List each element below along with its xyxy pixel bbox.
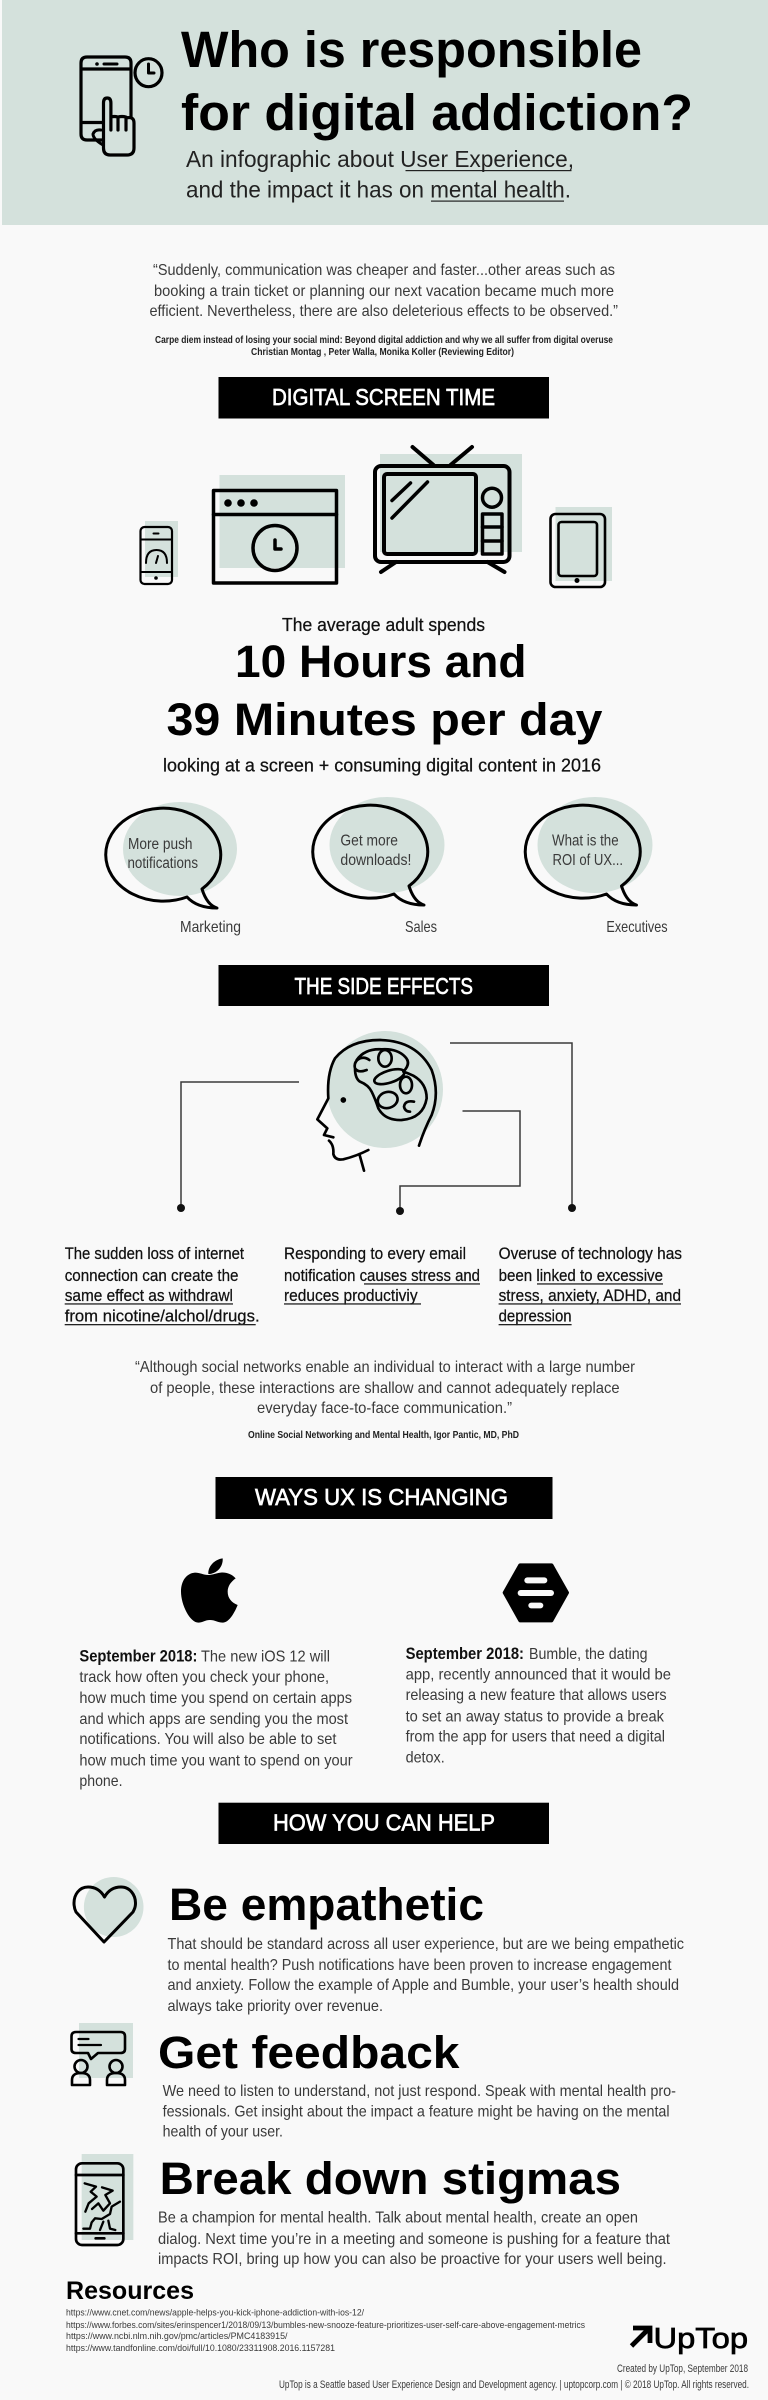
text: bumble update: app, recently announced that it would be xyxy=(406,1666,671,1683)
opening quote: “Suddenly, communication was cheaper and faster...other areas such as xyxy=(153,262,615,279)
side effect: internet withdrawal: The sudden loss of internet xyxy=(65,1244,244,1263)
icon: television xyxy=(375,447,522,572)
text: break down stigmas body xyxy=(158,2210,671,2268)
side effect: internet withdrawal: from nicotine/alchol/drugs. xyxy=(65,1307,260,1326)
side effect: stress from notifications: reduces productiviy xyxy=(284,1286,418,1305)
side effect: mental health links: been linked to excessive xyxy=(499,1266,663,1285)
speech bubble: sales xyxy=(313,797,444,936)
side effect: internet withdrawal xyxy=(65,1244,260,1326)
text: break down stigmas body: dialog. Next time you’re in a meeting and someone is pushing for a feature that xyxy=(158,2231,671,2248)
text: apple ios 12 update: track how often you check your phone, xyxy=(79,1669,329,1686)
header band xyxy=(2,0,768,225)
icon: smartphone with gauge xyxy=(140,521,178,584)
icon: browser window with clock xyxy=(214,475,345,583)
side effect: stress from notifications xyxy=(284,1244,480,1305)
side effect: mental health links: stress, anxiety, ADHD, and xyxy=(499,1286,681,1305)
section heading: the side effects: THE SIDE EFFECTS xyxy=(294,973,473,999)
resources: https://www.ncbi.nlm.nih.gov/pmc/articles/PMC4183915/ xyxy=(66,2331,288,2342)
section heading: digital screen time: DIGITAL SCREEN TIME xyxy=(272,384,495,410)
text: be empathetic body: That should be standard across all user experience, but are we being empathetic xyxy=(168,1936,684,1953)
speech bubble: sales: Get more xyxy=(340,833,398,850)
text: be empathetic body xyxy=(168,1936,684,2015)
icon: head with tangled brain xyxy=(317,1031,443,1171)
text: be empathetic body: always take priority over revenue. xyxy=(168,1998,383,2015)
resources: https://www.forbes.com/sites/erinspencer1/2018/09/13/bumbles-new-snooze-feature-prioritizes-user-self-care-above-engagement-metrics xyxy=(66,2320,585,2331)
credits xyxy=(279,2363,749,2391)
section heading: the side effects xyxy=(218,965,549,1006)
opening quote: booking a train ticket or planning our next vacation became much more xyxy=(154,283,614,300)
connector: right callout xyxy=(450,1043,576,1212)
text: get feedback body: health of your user. xyxy=(163,2124,283,2141)
heading: be empathetic: Be empathetic xyxy=(169,1879,484,1930)
resources: https://www.tandfonline.com/doi/full/10.1080/23311908.2016.1157281 xyxy=(66,2343,335,2354)
text: bumble update: from the app for users that need a digital xyxy=(406,1729,665,1746)
speech bubble: executives: What is the xyxy=(552,833,619,850)
icon: bumble logo xyxy=(504,1565,567,1621)
speech bubble: executives: Executives xyxy=(606,919,668,936)
subtitle xyxy=(186,146,574,202)
social networks quote: of people, these interactions are shallow and cannot adequately replace xyxy=(150,1380,620,1397)
social networks quote: everyday face-to-face communication.” xyxy=(257,1400,512,1417)
text: get feedback body xyxy=(163,2083,676,2141)
speech bubble: marketing: notifications xyxy=(128,855,198,872)
screen time statistic xyxy=(163,614,602,776)
text: apple ios 12 update: how much time you want to spend on your xyxy=(79,1753,353,1770)
side effect: internet withdrawal: same effect as withdrawl xyxy=(65,1286,233,1305)
section heading: how you can help xyxy=(218,1803,549,1844)
heading: break down stigmas: Break down stigmas xyxy=(160,2153,621,2204)
text: get feedback body: We need to listen to understand, not just respond. Speak with mental health pro- xyxy=(163,2083,676,2100)
text: apple ios 12 update: The new iOS 12 will xyxy=(201,1649,330,1666)
speech bubble: sales: downloads! xyxy=(340,852,411,869)
side effect: internet withdrawal: connection can create the xyxy=(65,1266,238,1285)
text: be empathetic body: to mental health? Push notifications have been proven to increase engagement xyxy=(168,1957,672,1974)
resources xyxy=(66,2277,585,2354)
screen time statistic: 10 Hours and xyxy=(235,636,526,687)
screen time statistic: 39 Minutes per day xyxy=(166,694,602,745)
resources: https://www.cnet.com/news/apple-helps-you-kick-iphone-addiction-with-ios-12/ xyxy=(66,2308,364,2319)
opening quote xyxy=(150,262,618,320)
section heading: digital screen time xyxy=(218,377,549,418)
text: apple ios 12 update: notifications. You will also be able to set xyxy=(79,1731,337,1748)
icon: tablet xyxy=(550,507,612,587)
speech bubble: executives: ROI of UX... xyxy=(552,852,623,869)
text: break down stigmas body: impacts ROI, bring up how you can also be proactive for your users well being. xyxy=(158,2251,667,2268)
speech bubble: sales: Sales xyxy=(405,919,437,936)
speech bubble: executives xyxy=(525,797,668,936)
text: bumble update: Bumble, the dating xyxy=(529,1646,648,1663)
title: Who is responsible xyxy=(181,21,642,78)
icon: cracked phone xyxy=(76,2154,133,2245)
icon: apple logo xyxy=(181,1558,238,1623)
text: apple ios 12 update: phone. xyxy=(79,1773,122,1790)
speech bubble: marketing xyxy=(106,802,241,936)
connector: middle callout xyxy=(396,1111,520,1215)
side effect: mental health links: Overuse of technology has xyxy=(499,1244,682,1263)
section heading: how you can help: HOW YOU CAN HELP xyxy=(273,1810,495,1836)
opening quote: efficient. Nevertheless, there are also deleterious effects to be observed.” xyxy=(150,303,618,320)
text: apple ios 12 update xyxy=(79,1648,353,1790)
side effect: mental health links xyxy=(499,1244,682,1326)
quote citation xyxy=(155,334,613,358)
quote citation: Carpe diem instead of losing your social mind: Beyond digital addiction and why we all suffer from digital overuse xyxy=(155,334,613,346)
text: apple ios 12 update: and which apps are sending you the most xyxy=(79,1711,349,1728)
section heading: ways ux is changing xyxy=(216,1477,552,1519)
text: get feedback body: fessionals. Get insight about the impact a feature might be having on the mental xyxy=(163,2104,670,2121)
text: apple ios 12 update: how much time you spend on certain apps xyxy=(79,1690,352,1707)
text: bumble update: to set an away status to provide a break xyxy=(406,1709,665,1726)
speech bubble: marketing: Marketing xyxy=(180,919,241,936)
resources: Resources xyxy=(66,2277,194,2305)
section heading: ways ux is changing: WAYS UX IS CHANGING xyxy=(255,1484,508,1510)
text: bumble update: September 2018: xyxy=(406,1645,524,1663)
side effect: mental health links: depression xyxy=(499,1307,572,1326)
text: break down stigmas body: Be a champion for mental health. Talk about mental health, create an open xyxy=(158,2210,638,2227)
social networks quote xyxy=(135,1359,636,1417)
text: bumble update: detox. xyxy=(406,1750,445,1767)
side effect: stress from notifications: Responding to every email xyxy=(284,1244,466,1263)
uptop logo: UpTop xyxy=(654,2323,748,2355)
icon: phone with tapping hand and clock xyxy=(81,57,162,155)
title: for digital addiction? xyxy=(181,84,693,141)
side effect: stress from notifications: notification causes stress and xyxy=(284,1266,480,1285)
text: bumble update xyxy=(406,1645,671,1767)
text: bumble update: releasing a new feature that allows users xyxy=(406,1687,667,1704)
quote citation: Online Social Networking and Mental Health, Igor Pantic, MD, PhD xyxy=(248,1429,519,1441)
screen time statistic: The average adult spends xyxy=(282,614,485,635)
quote citation: Christian Montag , Peter Walla, Monika Koller (Reviewing Editor) xyxy=(251,346,514,358)
text: apple ios 12 update: September 2018: xyxy=(79,1648,197,1666)
connector: left callout xyxy=(177,1082,299,1212)
title xyxy=(181,21,693,141)
text: be empathetic body: and anxiety. Follow the example of Apple and Bumble, your user’s health should xyxy=(168,1977,679,1994)
speech bubble: marketing: More push xyxy=(128,836,192,853)
heading: get feedback: Get feedback xyxy=(158,2027,461,2078)
subtitle: An infographic about User Experience, xyxy=(186,146,574,172)
social networks quote: “Although social networks enable an individual to interact with a large number xyxy=(135,1359,636,1376)
screen time statistic: looking at a screen + consuming digital content in 2016 xyxy=(163,756,601,776)
icon: heart xyxy=(74,1877,144,1942)
icon: feedback speech box and two people xyxy=(72,2023,133,2085)
subtitle: and the impact it has on mental health. xyxy=(186,176,571,202)
